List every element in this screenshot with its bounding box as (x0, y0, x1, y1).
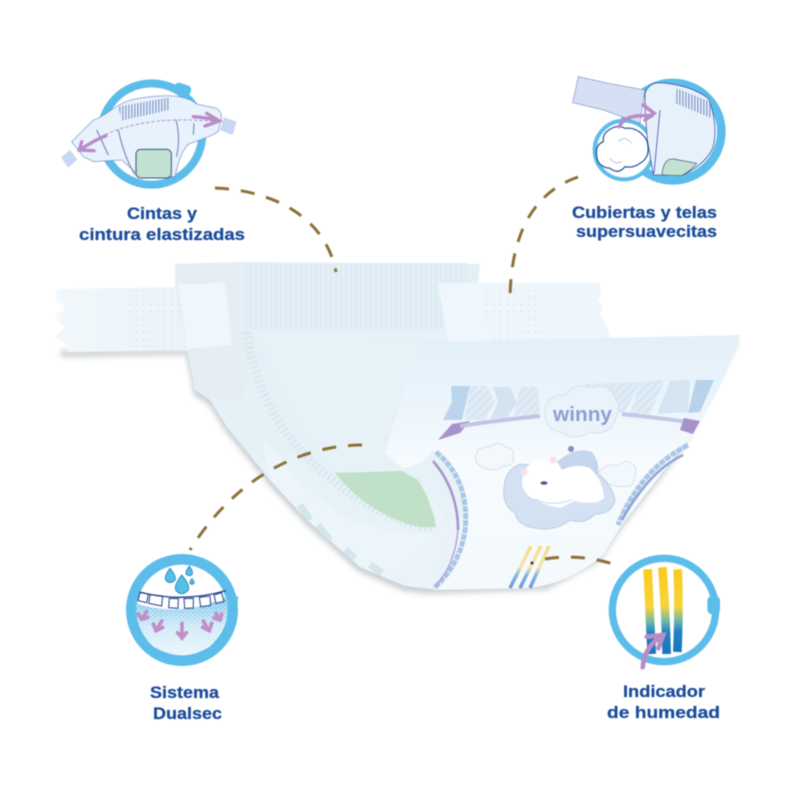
purple arrow (619, 105, 654, 127)
icon: wetness indicator (612, 558, 720, 667)
tape section (573, 77, 645, 123)
front panel (385, 335, 740, 590)
leader line: elastic waist (215, 188, 336, 272)
waist side panel (175, 262, 258, 400)
heading: de humedad: de humedad (607, 703, 720, 722)
small diaper (72, 96, 221, 177)
wetness indicator stripes (510, 546, 549, 588)
purple arrow (643, 635, 663, 667)
left fastening tape (55, 287, 188, 352)
icon: soft covers (573, 77, 721, 180)
right small cloud (598, 461, 636, 487)
right ruffle (388, 490, 448, 585)
icon: Dualsec system (131, 559, 238, 661)
absorbent green core (335, 471, 436, 527)
elastic waistband (243, 263, 480, 342)
ruffled inner cuff (247, 332, 435, 529)
tape ends (61, 117, 237, 168)
right fastening tape (440, 283, 611, 345)
heading: supersuavecitas: supersuavecitas (576, 222, 717, 241)
heading: Sistema: Sistema (150, 683, 220, 702)
logo text: winny (552, 404, 613, 426)
waist chevron band (443, 380, 714, 420)
right tape patch (438, 283, 490, 341)
green core (136, 149, 171, 178)
purple arrows (138, 612, 222, 638)
green core (662, 159, 697, 176)
stretch arrows (79, 113, 219, 151)
water drops (165, 566, 194, 594)
leader line: Dualsec (190, 445, 362, 550)
bear on cloud (504, 446, 615, 529)
diaper back body (175, 262, 740, 589)
cotton cloud (596, 126, 648, 171)
diaper inner cavity (262, 342, 420, 475)
heading: Cintas y: Cintas y (127, 204, 198, 223)
heading: Dualsec: Dualsec (153, 704, 222, 723)
small diaper panel (645, 83, 715, 175)
absorbent layer (136, 597, 228, 655)
waist hatch (676, 88, 712, 118)
leader start dot (530, 562, 534, 564)
logo cloud (545, 386, 618, 437)
heading: cintura elastizadas: cintura elastizadas (79, 225, 245, 244)
leader line: soft covers (510, 177, 578, 302)
left small cloud (476, 444, 514, 470)
outer leg area (262, 435, 436, 586)
left leg trim (433, 452, 466, 588)
left tape patch (178, 283, 232, 349)
seam (654, 110, 660, 173)
right leg trim (618, 445, 688, 525)
heading: Indicador: Indicador (623, 682, 705, 701)
colour stripes (648, 567, 678, 654)
seams (97, 120, 194, 175)
top sheet cells (138, 593, 224, 608)
diaper illustration (55, 262, 740, 594)
icon: elastic tapes and waist (61, 82, 237, 185)
heading: Cubiertas y telas: Cubiertas y telas (572, 203, 717, 222)
leader line: wetness indicator (545, 557, 619, 566)
waist hatch (118, 97, 169, 121)
purple waist lines (438, 414, 700, 440)
